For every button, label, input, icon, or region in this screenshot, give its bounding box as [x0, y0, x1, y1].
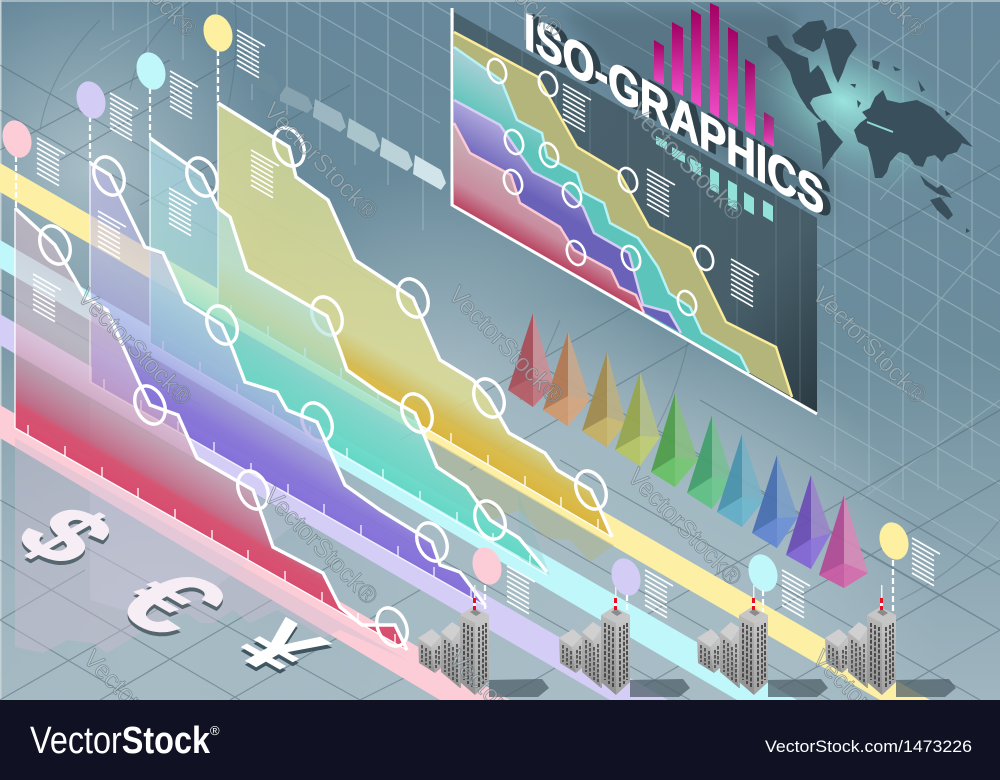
watermarks: VectorStock® — [258, 97, 384, 226]
marker: pink — [468, 544, 506, 588]
pyramid 3 — [582, 352, 626, 447]
title: ISO-GRAPHICS — [524, 1, 824, 228]
panel area: lavender — [454, 100, 681, 333]
back panel — [452, 8, 817, 414]
area — [218, 103, 612, 537]
line — [150, 138, 547, 572]
dashed leaders — [16, 50, 218, 208]
axes — [90, 163, 487, 607]
leader — [892, 560, 894, 612]
pyramid 8 — [752, 455, 798, 548]
watermarks: VectorStock® — [624, 98, 750, 227]
area — [90, 163, 485, 605]
pyramid 1 — [508, 313, 554, 407]
marker: yellow — [875, 519, 913, 563]
line — [218, 103, 612, 537]
currency: yen: ¥ — [209, 610, 352, 692]
chart text blocks — [33, 150, 279, 322]
area — [150, 138, 547, 572]
watermarks: VectorStock® — [443, 645, 569, 774]
markers — [34, 221, 413, 651]
legend: cyan — [132, 49, 170, 93]
strip: lavender — [0, 314, 668, 700]
top legend — [0, 11, 265, 208]
area — [15, 208, 407, 650]
footer bar — [0, 700, 1000, 780]
panel grid — [487, 30, 800, 405]
watermarks: VectorStock® — [443, 281, 569, 410]
panel axes — [452, 8, 817, 414]
pyramid 10 — [819, 495, 868, 588]
text block — [782, 570, 810, 618]
world map — [720, 0, 994, 233]
currency: yen: ¥ — [209, 606, 352, 688]
title — [524, 1, 831, 230]
strip: cyan — [0, 240, 797, 700]
building group 1 — [418, 544, 549, 697]
leader — [484, 585, 486, 610]
strip: pink — [0, 405, 510, 700]
chart: pink — [15, 208, 413, 651]
legend: yellow — [199, 11, 237, 55]
panel text blocks — [563, 84, 759, 307]
floor strips — [0, 163, 930, 700]
floor shadows of charts — [15, 400, 614, 660]
currency: euro: € — [84, 556, 258, 657]
markers — [181, 153, 511, 544]
pyramid 9 — [786, 475, 831, 569]
markers — [88, 152, 453, 566]
watermarks: VectorStock® — [622, 463, 748, 592]
line — [90, 163, 485, 605]
building group 3 — [697, 551, 828, 697]
watermarks: VectorStock® — [807, 281, 933, 410]
pyramid 5 — [651, 393, 698, 487]
panel markers — [484, 56, 717, 318]
currency: euro: € — [84, 552, 258, 653]
text block — [912, 538, 940, 586]
magenta bar chart — [654, 3, 774, 147]
strip: yellow — [0, 163, 930, 700]
legend: pink — [0, 117, 36, 161]
legend: lavender — [72, 78, 110, 122]
axes — [15, 208, 407, 650]
panel area: yellow — [454, 32, 792, 397]
building group 2 — [559, 555, 690, 697]
line — [15, 208, 407, 650]
legend text blocks — [37, 30, 265, 186]
footer registered mark: ® — [210, 723, 220, 738]
pyramid 7 — [717, 434, 764, 527]
title shadow halo — [560, 10, 830, 215]
chart: cyan — [150, 138, 547, 575]
text block — [645, 570, 673, 618]
markers — [268, 123, 612, 514]
text block — [507, 566, 535, 614]
title: ISO-GRAPHICS — [531, 3, 831, 230]
pyramids — [508, 313, 868, 588]
chart: lavender — [88, 152, 487, 607]
marker: lavender — [607, 555, 645, 599]
leader — [626, 595, 628, 612]
leader — [762, 590, 764, 612]
teal bar chart — [656, 136, 773, 222]
panel area: pink — [454, 123, 644, 313]
pyramid 2 — [543, 332, 590, 426]
panel area: cyan — [454, 47, 749, 373]
arrows — [247, 67, 446, 190]
wall grid — [60, 0, 1000, 560]
building group 4 — [825, 519, 956, 697]
marker: cyan — [744, 551, 782, 595]
pyramid 6 — [687, 415, 733, 509]
chart: yellow — [218, 103, 612, 537]
watermarks: VectorStock® — [72, 283, 198, 412]
footer logo: VectorStock — [30, 720, 211, 762]
axes — [150, 138, 547, 575]
watermarks: VectorStock® — [78, 645, 204, 774]
pyramid 4 — [615, 372, 660, 466]
watermarks: VectorStock® — [258, 482, 384, 611]
footer url: VectorStock.com/1473226 — [765, 737, 972, 756]
watermarks: VectorStock® — [807, 645, 933, 774]
axes — [218, 103, 612, 537]
